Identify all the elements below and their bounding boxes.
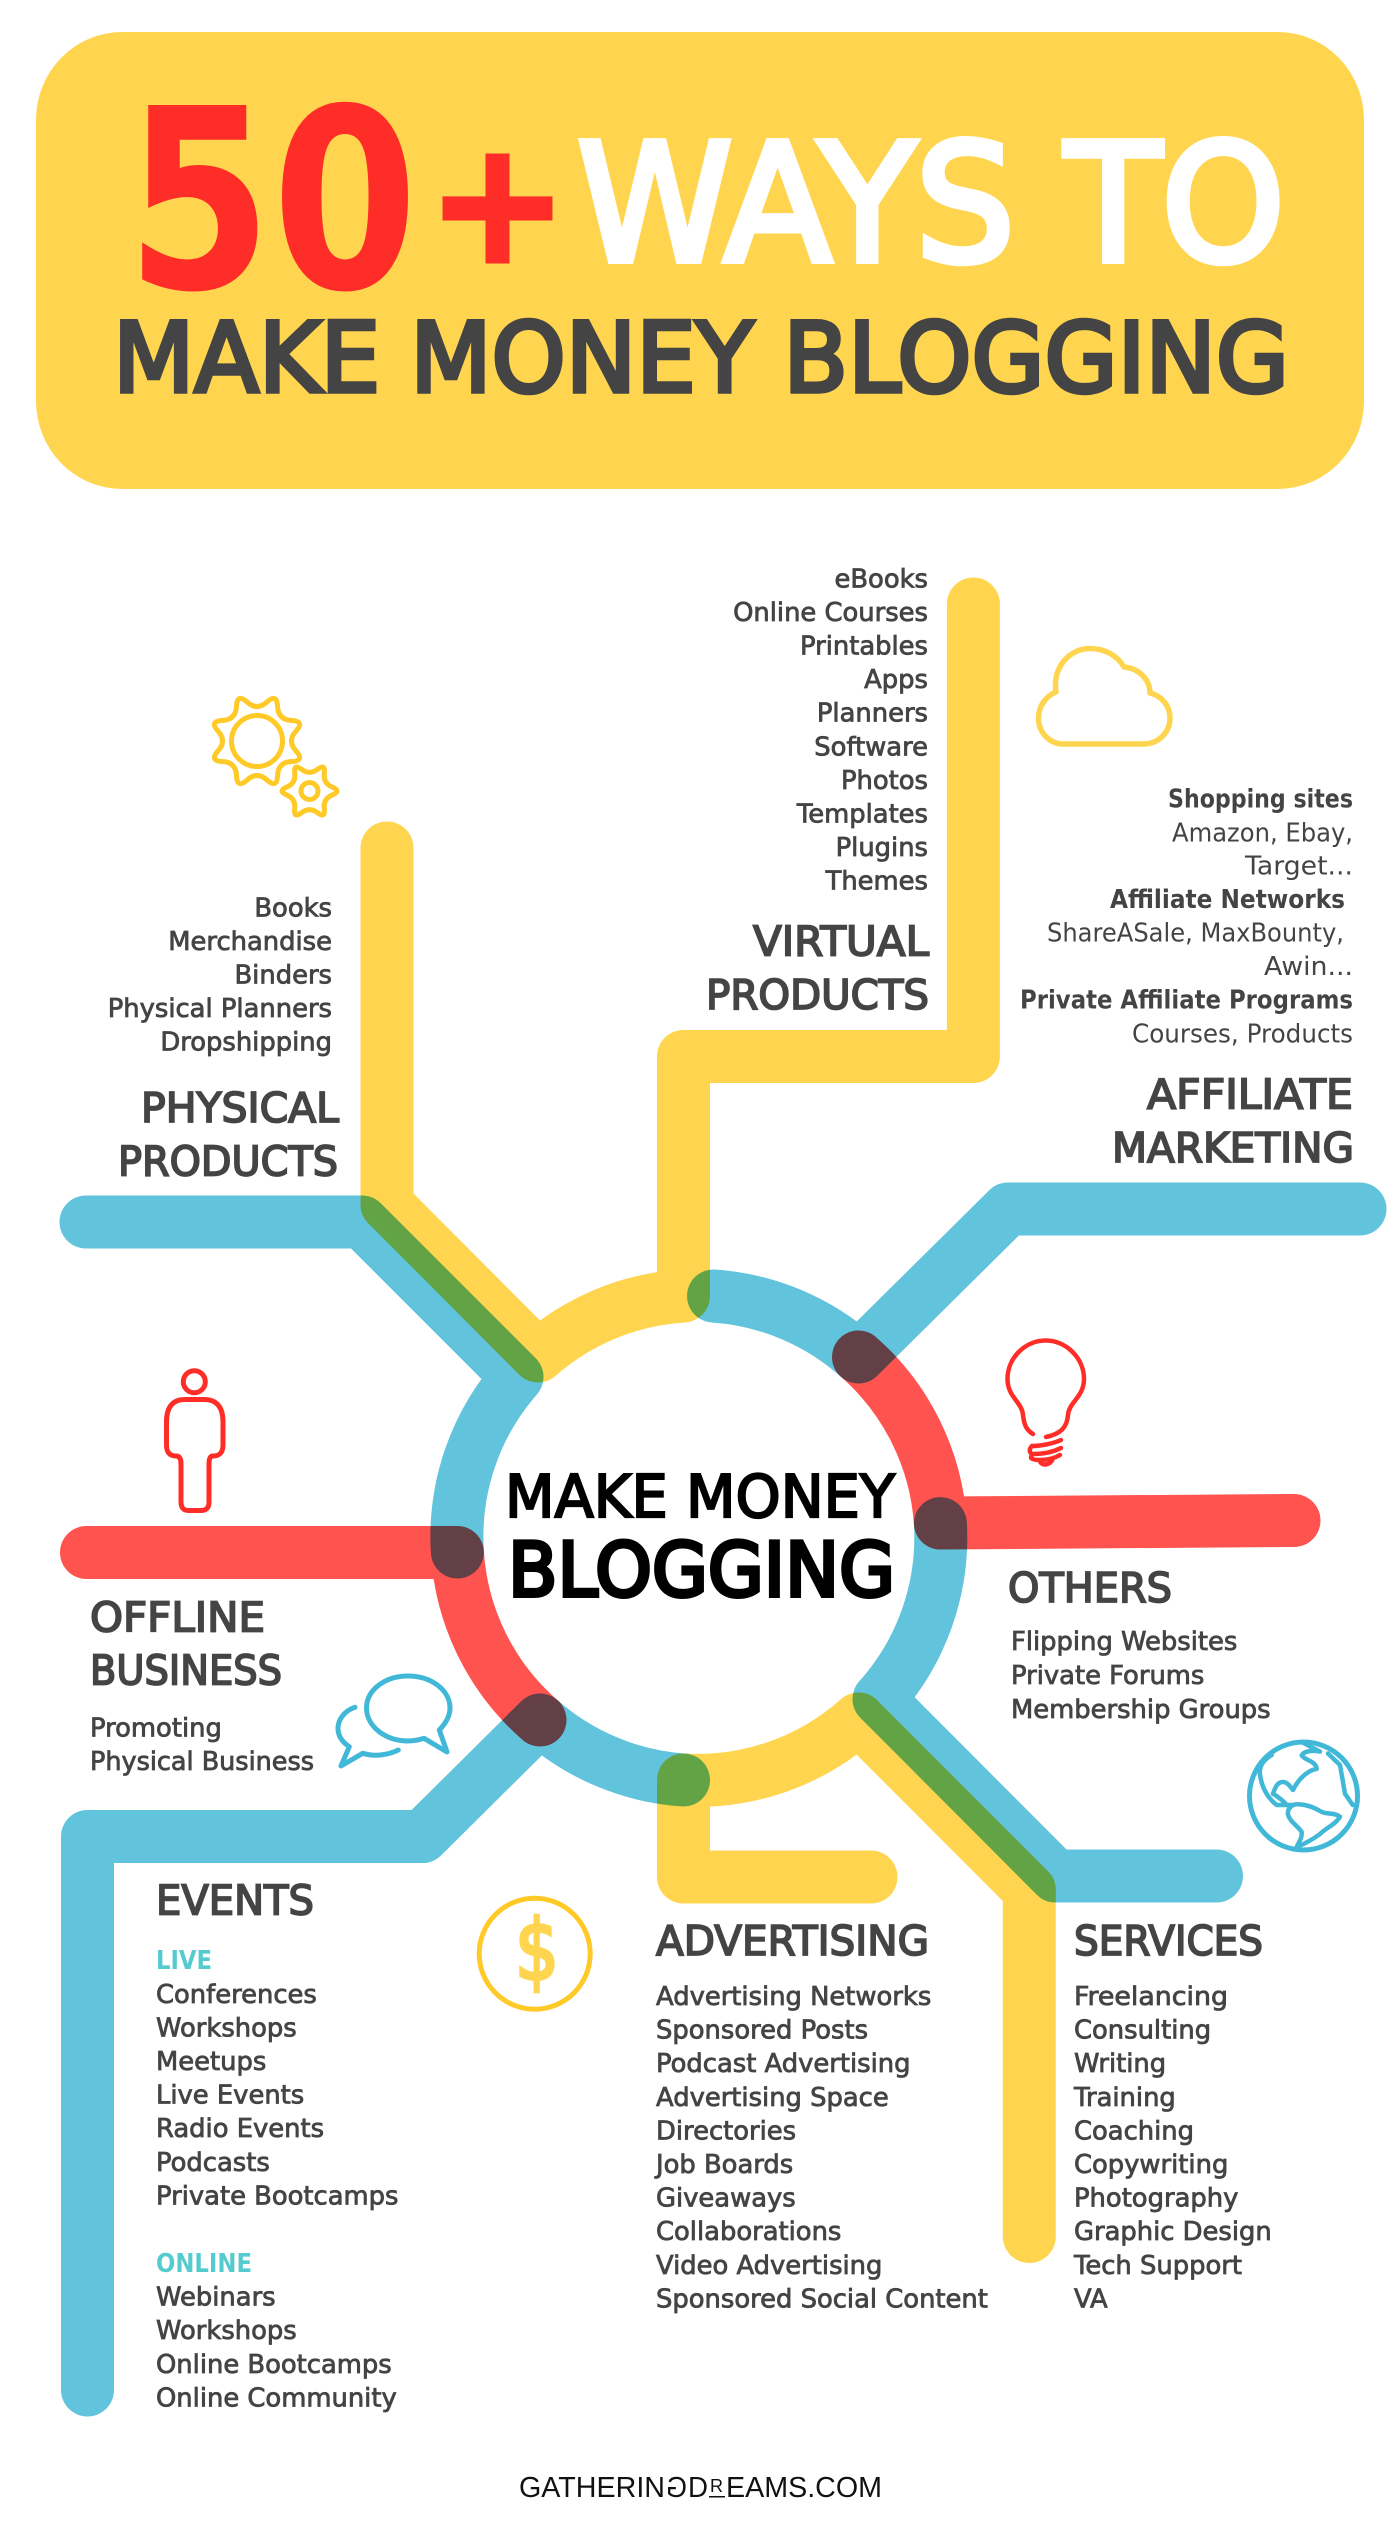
title make money blogging: MAKE MONEY BLOGGING	[113, 302, 1289, 414]
virtual products list: Templates	[796, 800, 928, 830]
offline business list: Physical Business	[90, 1747, 314, 1777]
panel: affiliate marketing	[1020, 784, 1354, 1172]
icon: person	[166, 1371, 223, 1510]
offline business heading: BUSINESS	[90, 1647, 282, 1695]
affiliate marketing list: Private Affiliate Programs	[1020, 986, 1353, 1016]
physical products heading: PHYSICAL	[141, 1084, 339, 1132]
advertising list: Directories	[656, 2116, 796, 2146]
affiliate marketing heading	[1112, 1070, 1354, 1172]
virtual products heading	[706, 918, 929, 1019]
affiliate marketing list: ShareASale, MaxBounty,	[1047, 918, 1344, 948]
events live list: Radio Events	[156, 2114, 324, 2144]
icon: gears	[214, 698, 337, 815]
affiliate marketing list: Target...	[1244, 852, 1353, 882]
offline business heading	[90, 1594, 282, 1695]
center blogging: BLOGGING	[508, 1527, 895, 1614]
services list: Copywriting	[1074, 2150, 1228, 2180]
panel: services	[1073, 1917, 1272, 2314]
services list: VA	[1074, 2284, 1108, 2314]
events online list: Workshops	[156, 2316, 297, 2346]
events online list: Online Community	[156, 2383, 397, 2413]
icon: dollar coin	[479, 1898, 590, 2009]
virtual products list: Printables	[800, 632, 928, 662]
icon: cloud	[1038, 648, 1170, 744]
virtual products list	[733, 564, 928, 897]
virtual products list: eBooks	[834, 564, 928, 594]
dollar sign: $	[515, 1902, 559, 2000]
events live list: Live Events	[156, 2081, 304, 2111]
blue metro lines	[86, 1209, 1360, 2390]
events online list	[156, 2282, 397, 2413]
virtual products list: Planners	[817, 699, 928, 729]
logo small r: R	[710, 2476, 723, 2496]
title banner	[36, 32, 1364, 489]
panel: advertising	[654, 1917, 988, 2314]
affiliate marketing heading: AFFILIATE	[1147, 1070, 1353, 1118]
logo mirrored g: G	[666, 2472, 687, 2504]
events live list	[156, 1980, 398, 2211]
advertising list: Giveaways	[656, 2184, 796, 2214]
red metro lines	[86, 1357, 1294, 1720]
services list: Consulting	[1074, 2016, 1211, 2046]
title plus sign: +	[431, 112, 564, 296]
title ways to: WAYS TO	[577, 110, 1285, 300]
physical products list: Binders	[234, 961, 332, 991]
others list: Private Forums	[1011, 1661, 1204, 1691]
services list: Writing	[1074, 2049, 1166, 2079]
advertising list: Advertising Space	[656, 2083, 889, 2113]
events online list: Online Bootcamps	[156, 2350, 392, 2380]
events live label: LIVE	[156, 1946, 212, 1976]
advertising list: Collaborations	[656, 2217, 841, 2247]
services list: Training	[1073, 2083, 1176, 2113]
physical products heading: PRODUCTS	[118, 1138, 338, 1186]
virtual products list: Apps	[864, 665, 928, 695]
advertising list: Job Boards	[654, 2150, 793, 2180]
affiliate marketing list: Awin...	[1264, 952, 1353, 982]
others list	[1011, 1627, 1271, 1725]
coin outline	[479, 1898, 590, 2009]
virtual products list: Online Courses	[733, 598, 928, 628]
advertising list: Video Advertising	[656, 2251, 882, 2281]
services list: Tech Support	[1073, 2251, 1242, 2281]
others list: Membership Groups	[1011, 1695, 1271, 1725]
offline business list	[90, 1714, 314, 1777]
logo r underline	[709, 2496, 725, 2498]
icon: chat bubbles	[338, 1676, 450, 1766]
services list	[1073, 1982, 1272, 2314]
virtual products list: Plugins	[836, 833, 928, 863]
offline business list: Promoting	[90, 1714, 222, 1744]
physical products list	[108, 894, 332, 1058]
affiliate marketing list	[1020, 784, 1353, 1050]
events live list: Conferences	[156, 1980, 317, 2010]
physical products list: Books	[254, 894, 332, 924]
services heading: SERVICES	[1074, 1917, 1263, 1965]
center make money: MAKE MONEY	[505, 1462, 896, 1531]
physical products list: Merchandise	[168, 927, 332, 957]
advertising list: Sponsored Social Content	[656, 2284, 988, 2314]
events live list: Workshops	[156, 2014, 297, 2044]
panel: physical products	[108, 894, 339, 1186]
virtual products list: Software	[814, 732, 928, 762]
physical products heading	[118, 1084, 339, 1186]
events online label: ONLINE	[156, 2249, 252, 2279]
advertising list: Advertising Networks	[656, 1982, 931, 2012]
events online list: Webinars	[156, 2282, 276, 2312]
logo gatherin: GATHERIN	[519, 2472, 665, 2504]
others list: Flipping Websites	[1011, 1627, 1237, 1657]
panel: others	[1008, 1564, 1271, 1725]
services list: Coaching	[1074, 2116, 1194, 2146]
center label	[505, 1462, 896, 1614]
offline business heading: OFFLINE	[90, 1594, 265, 1642]
events live list: Private Bootcamps	[156, 2181, 398, 2211]
virtual products list: Themes	[825, 867, 928, 897]
panel: offline business	[90, 1594, 314, 1777]
affiliate marketing heading: MARKETING	[1112, 1124, 1354, 1172]
services list: Freelancing	[1074, 1982, 1228, 2012]
footer logo	[519, 2472, 882, 2504]
icon: globe	[1250, 1742, 1358, 1850]
yellow metro lines	[387, 604, 1029, 2236]
advertising heading: ADVERTISING	[656, 1917, 929, 1965]
advertising list	[654, 1982, 988, 2314]
services list: Graphic Design	[1074, 2217, 1272, 2247]
logo eams.com: EAMS.COM	[726, 2472, 882, 2504]
banner background	[36, 32, 1364, 489]
panel: events	[156, 1876, 398, 2413]
events live list: Meetups	[156, 2047, 266, 2077]
services list: Photography	[1074, 2184, 1238, 2214]
advertising list: Sponsored Posts	[656, 2016, 868, 2046]
affiliate marketing list: Shopping sites	[1168, 784, 1353, 814]
affiliate marketing list: Affiliate Networks	[1110, 885, 1345, 915]
virtual products heading: PRODUCTS	[706, 971, 929, 1019]
others heading: OTHERS	[1008, 1564, 1172, 1612]
events heading: EVENTS	[156, 1876, 314, 1924]
virtual products list: Photos	[841, 766, 928, 796]
virtual products heading: VIRTUAL	[753, 918, 929, 966]
title number 50: 50	[126, 56, 418, 348]
events live list: Podcasts	[156, 2148, 270, 2178]
affiliate marketing list: Amazon, Ebay,	[1172, 818, 1353, 848]
logo d: D	[688, 2472, 708, 2504]
icon: light bulb	[1008, 1340, 1084, 1464]
advertising list: Podcast Advertising	[656, 2049, 910, 2079]
physical products list: Dropshipping	[160, 1028, 332, 1058]
panel: virtual products	[706, 564, 929, 1019]
affiliate marketing list: Courses, Products	[1132, 1020, 1353, 1050]
physical products list: Physical Planners	[108, 994, 332, 1024]
